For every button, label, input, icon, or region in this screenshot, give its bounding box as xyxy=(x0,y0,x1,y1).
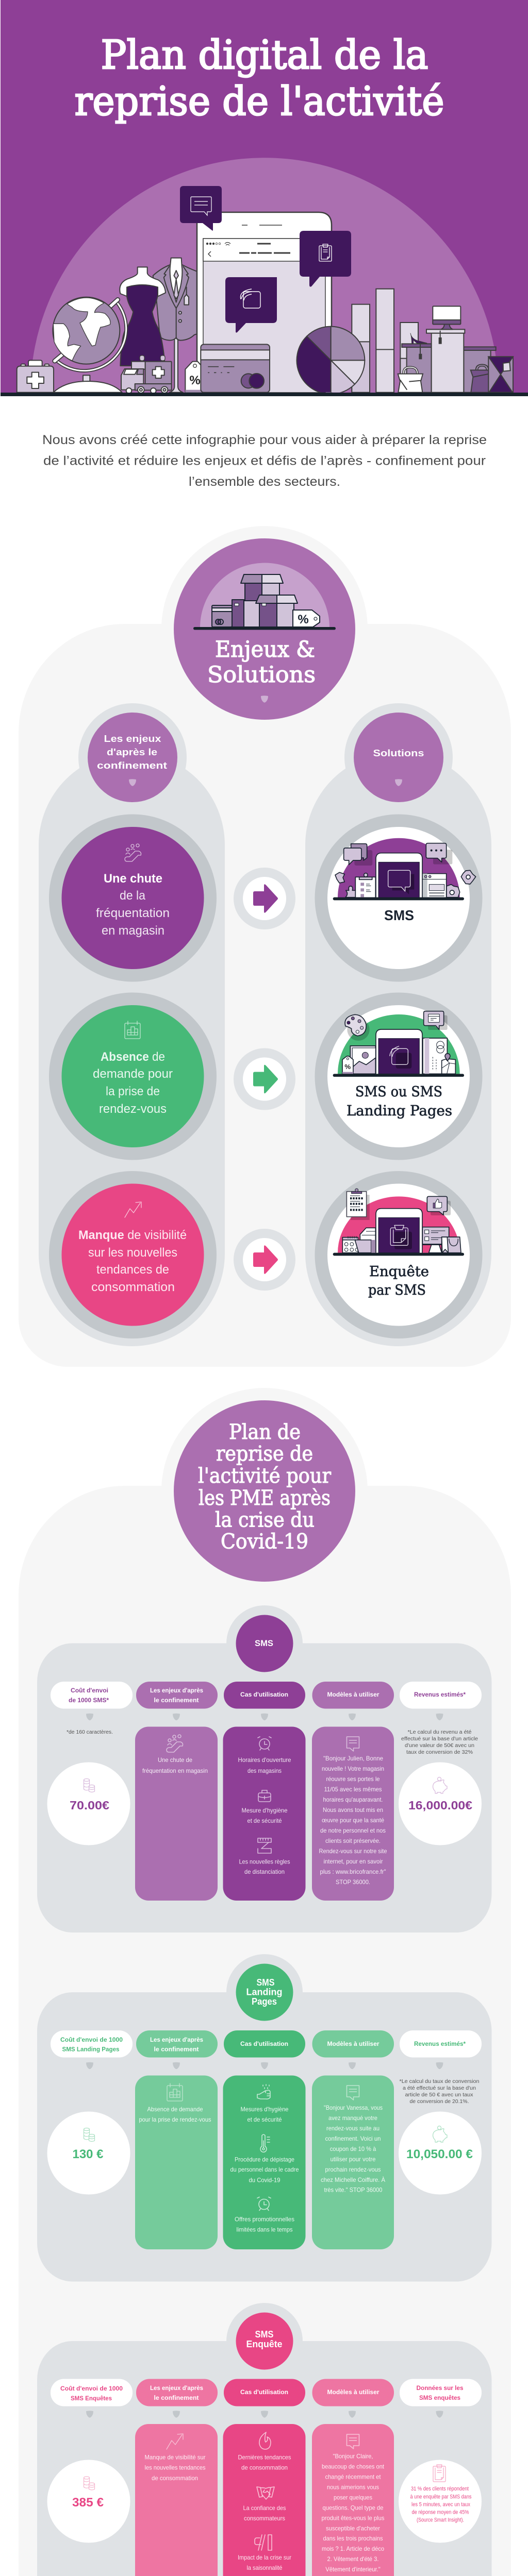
card: modèles: chez Michelle Coiffure. À xyxy=(321,2176,385,2183)
heading circle: plan de reprise: Covid-19 xyxy=(221,1530,308,1554)
cost column: *de 160 caractères. xyxy=(67,1730,113,1735)
card: cas d'utilisation xyxy=(223,2424,305,2576)
data column: de réponse moyen de 45% xyxy=(411,2509,469,2515)
illustration: objects on the left xyxy=(17,258,270,394)
icon: escalator xyxy=(125,844,141,861)
icon: first aid kit xyxy=(17,360,54,393)
bubble: survey xyxy=(300,231,351,287)
icon: trend xyxy=(125,1202,141,1217)
ground line xyxy=(1,393,528,396)
intro text: Nous avons créé cette infographie pour vous aider à préparer la reprise xyxy=(42,433,487,447)
header pills: le confinement xyxy=(154,2394,199,2401)
intro text xyxy=(42,433,487,489)
sub heading: les enjeux xyxy=(78,703,187,811)
markers xyxy=(86,2411,443,2418)
revenue column: 16,000.00€ xyxy=(408,1799,472,1812)
card: modèles: très vite." STOP 36000 xyxy=(324,2187,383,2194)
section badge: Landing xyxy=(246,1987,283,1997)
heading circle: plan de reprise: Plan de xyxy=(229,1420,301,1444)
markers xyxy=(86,2062,443,2069)
card: cas d'utilisation xyxy=(223,2075,305,2249)
icon: gift box xyxy=(488,357,513,393)
hemisphere backdrop xyxy=(30,158,499,393)
card: cas d'utilisation: Les nouvelles règles xyxy=(239,1858,290,1865)
icon: shop shelves xyxy=(402,329,496,393)
heading circle: plan de reprise: reprise de xyxy=(216,1442,313,1466)
card: cas d'utilisation: la saisonnalité xyxy=(246,2564,283,2571)
header pills: Coût d'envoi xyxy=(71,1687,108,1694)
card: enjeux xyxy=(135,2075,218,2249)
enjeu 1: chute de fréquentation: de la xyxy=(120,889,146,903)
header pills: le confinement xyxy=(154,1697,199,1704)
card: cas d'utilisation: des magasins xyxy=(248,1767,282,1774)
card: modèles: nouvelle ! Votre magasin xyxy=(322,1765,384,1772)
cost column xyxy=(47,2460,130,2543)
header pills: Coût d'envoi de 1000 xyxy=(60,2385,123,2392)
panel: left column enjeux xyxy=(39,752,225,1346)
enjeu 3: manque de visibilité xyxy=(49,1171,217,1338)
data column: à une enquête par SMS dans xyxy=(410,2494,472,2500)
solution 1: SMS xyxy=(315,814,483,982)
illustration: objects on the right xyxy=(297,289,513,394)
intro text: l’ensemble des secteurs. xyxy=(189,474,340,489)
card: cas d'utilisation: limitées dans le temps xyxy=(236,2226,293,2233)
icon: monitor xyxy=(433,306,460,329)
icon: boxes xyxy=(212,574,320,627)
icon: bank card xyxy=(201,344,270,393)
card: cas d'utilisation: Mesure d'hygiène xyxy=(241,1807,288,1814)
card: modèles: Nous avons tout mis en xyxy=(323,1806,383,1814)
card: modèles: prochain rendez-vous xyxy=(325,2166,381,2173)
sub heading: les enjeux: d'après le xyxy=(107,747,157,757)
enjeu 3: manque de visibilité: sur les nouvelles xyxy=(88,1246,177,1260)
title: reprise de l'activité xyxy=(74,79,444,125)
enjeu 2: absence de demande xyxy=(49,992,217,1160)
arrow 2 xyxy=(234,1048,295,1110)
enjeu 2: absence de demande: la prise de xyxy=(106,1084,160,1098)
pie chart xyxy=(297,327,365,394)
card: cas d'utilisation: Mesures d'hygiène xyxy=(240,2106,289,2113)
bar chart xyxy=(352,289,418,393)
section badge: Enquête xyxy=(246,2339,283,2349)
card: enjeux: Manque de visibilité sur xyxy=(144,2453,205,2461)
sub heading: les enjeux: Les enjeux xyxy=(104,734,161,744)
card: cas d'utilisation: La confiance des xyxy=(243,2504,286,2512)
solution 3: Enquête par SMS: par SMS xyxy=(368,1282,426,1298)
markers xyxy=(86,1714,443,1720)
header pills: Cas d'utilisation xyxy=(240,1691,288,1698)
card: cas d'utilisation: Offres promotionnelles xyxy=(235,2215,294,2223)
card: modèles: internet, pour en savoir xyxy=(324,1858,383,1865)
enjeu 3: manque de visibilité: Manque de visibilité xyxy=(78,1228,187,1242)
header pills: SMS Landing Pages xyxy=(62,2045,120,2053)
card: enjeux xyxy=(135,2424,218,2576)
header pills: Données sur les xyxy=(417,2384,464,2392)
heading circle: plan de reprise xyxy=(174,1400,355,1582)
solution 2: SMS ou SMS Landing Pages xyxy=(315,992,483,1160)
header pills xyxy=(51,2379,482,2406)
card: enjeux xyxy=(135,1727,218,1901)
revenue column: taux de conversion de 32% xyxy=(406,1750,473,1755)
illustration: landing pages: % xyxy=(344,1063,351,1071)
sub heading: solutions xyxy=(344,703,453,811)
header pills: SMS enquêtes xyxy=(419,2394,460,2401)
card: enjeux: les nouvelles tendances xyxy=(144,2464,205,2471)
panel: plan de reprise xyxy=(19,1388,511,2576)
icon: boxes: % xyxy=(298,613,309,626)
revenue column: *Le calcul du revenu a été xyxy=(407,1730,472,1735)
revenue column: d'une valeur de 50€ avec un xyxy=(405,1743,474,1749)
icon: globe xyxy=(53,297,126,393)
title xyxy=(74,32,444,125)
cost column: 130 € xyxy=(72,2147,103,2161)
section badge xyxy=(226,1605,303,1682)
revenue column: *Le calcul du taux de conversion xyxy=(399,2078,480,2084)
enjeu 2: absence de demande: Absence de xyxy=(101,1050,165,1064)
card: modèles: Rendez-vous sur notre site xyxy=(319,1848,387,1855)
card: cas d'utilisation: consommateurs xyxy=(244,2515,285,2522)
card: modèles: coupon de 10 % à xyxy=(330,2145,376,2153)
revenue column: a été effectué sur la base d'un xyxy=(403,2085,476,2091)
illustration: landing pages xyxy=(333,1011,464,1077)
card: modèles xyxy=(312,2424,394,2576)
section badge: SMS xyxy=(257,1977,274,1988)
enjeu 1: chute de fréquentation: en magasin xyxy=(102,924,164,938)
cost column: 70.00€ xyxy=(70,1799,109,1812)
card: modèles: avez manqué votre xyxy=(328,2114,377,2122)
bubble: message xyxy=(180,186,222,231)
card: enjeux: pour la prise de rendez-vous xyxy=(139,2116,211,2123)
icon: price tag xyxy=(185,362,205,393)
solution 1: SMS: SMS xyxy=(384,907,414,923)
header pills: de 1000 SMS* xyxy=(69,1697,109,1704)
illustration: tablet xyxy=(197,212,332,393)
card: cas d'utilisation: de consommation xyxy=(241,2464,288,2471)
card: modèles: mois ? 1. Article de déco xyxy=(322,2545,384,2552)
header pills xyxy=(51,2030,482,2058)
solution 3: Enquête par SMS xyxy=(315,1171,483,1338)
panel: enjeux et solutions xyxy=(19,526,511,1367)
section badge xyxy=(226,1954,303,2030)
card: enjeux: Absence de demande xyxy=(147,2106,203,2113)
revenue column xyxy=(399,1730,482,1845)
section: SMS Enquête xyxy=(37,2303,492,2576)
card: modèles: nous aimerions vous xyxy=(327,2483,379,2490)
header pills: Modèles à utiliser xyxy=(327,2388,380,2396)
icon: dress mannequin xyxy=(120,267,166,366)
data column: 31 % des clients répondent xyxy=(411,2486,469,2492)
card: modèles: dans les trois prochains xyxy=(323,2535,383,2542)
card: modèles: utiliser pour votre xyxy=(330,2156,376,2163)
hero banner xyxy=(1,0,528,396)
revenue column: 10,050.00 € xyxy=(406,2147,473,2161)
card: modèles: de notre personnel et nos xyxy=(320,1827,386,1834)
icon: ambulance xyxy=(121,355,172,394)
heading circle: plan de reprise: la crise du xyxy=(215,1509,315,1532)
title: Plan digital de la xyxy=(101,32,428,78)
arrow 1 xyxy=(234,868,295,929)
card: modèles: 2. Vêtement d'été 3. xyxy=(327,2555,378,2563)
card: modèles: Vêtement d'interieur." xyxy=(325,2566,381,2573)
header pills: Cas d'utilisation xyxy=(240,2040,288,2047)
card: cas d'utilisation: Impact de la crise sur xyxy=(238,2554,291,2561)
card: modèles: plus : www.bricofrance.fr" xyxy=(320,1868,386,1875)
card: modèles: clients soit préservée. xyxy=(325,1837,381,1844)
card: modèles: réouvre ses portes le xyxy=(326,1775,380,1783)
section badge: SMS xyxy=(255,2329,273,2340)
card: modèles: beaucoup de choses ont xyxy=(322,2463,385,2470)
header pills: Les enjeux d'après xyxy=(150,1687,203,1694)
solution 2: SMS ou SMS Landing Pages: SMS ou SMS xyxy=(355,1084,442,1100)
solution 3: Enquête par SMS: Enquête xyxy=(369,1264,429,1280)
card: modèles xyxy=(312,2075,394,2249)
card: modèles: STOP 36000. xyxy=(336,1878,370,1886)
card: cas d'utilisation: et de sécurité xyxy=(248,1817,282,1824)
header pills: Cas d'utilisation xyxy=(240,2388,288,2396)
cost column xyxy=(47,1730,130,1845)
enjeu 3: manque de visibilité: consommation xyxy=(91,1280,175,1294)
icon: shopping bags xyxy=(398,364,494,393)
card: modèles: "Bonjour Claire, xyxy=(333,2452,373,2460)
header pills: Coût d'envoi de 1000 xyxy=(60,2036,123,2043)
header pills: SMS Enquêtes xyxy=(71,2395,112,2402)
cost column xyxy=(47,2111,130,2195)
data column: les 5 minutes, avec un taux xyxy=(411,2502,470,2508)
sub heading: les enjeux: confinement xyxy=(97,760,167,771)
header pills: Les enjeux d'après xyxy=(150,2384,203,2392)
card: enjeux: de consommation xyxy=(152,2475,198,2482)
solution 2: SMS ou SMS Landing Pages: Landing Pages xyxy=(346,1103,452,1119)
card: cas d'utilisation: de distanciation xyxy=(244,1868,285,1875)
section badge xyxy=(226,2303,303,2379)
revenue column: article de 50 € avec un taux xyxy=(405,2092,473,2098)
section: SMS Landing Pages xyxy=(37,1954,492,2281)
enjeu 1: chute de fréquentation: fréquentation xyxy=(96,906,170,920)
card: modèles: changé récemment et xyxy=(325,2473,381,2480)
data column xyxy=(399,2460,482,2543)
card: cas d'utilisation: Dernières tendances xyxy=(238,2453,291,2461)
card: cas d'utilisation: du personnel dans le cadre xyxy=(230,2166,299,2173)
card: modèles: œuvre pour que la santé xyxy=(322,1817,384,1824)
revenue column: de conversion de 20.1%. xyxy=(409,2098,469,2105)
panel: right column solutions xyxy=(305,752,491,1346)
header pills: Revenus estimés* xyxy=(414,1691,466,1698)
card: modèles xyxy=(312,1727,394,1901)
icon: suit jacket xyxy=(153,258,197,341)
section badge: Pages xyxy=(252,1996,277,2007)
card: enjeux: Une chute de xyxy=(158,1756,192,1764)
data column: (Source Smart Insight). xyxy=(417,2517,464,2523)
intro text: de l’activité et réduire les enjeux et défis de l’après - confinement pour xyxy=(43,453,486,468)
illustration: survey xyxy=(333,1189,464,1256)
card: modèles: questions. Quel type de xyxy=(323,2504,384,2511)
icon: price tag: % xyxy=(189,374,201,387)
header pills: Modèles à utiliser xyxy=(327,2040,380,2047)
enjeu 1: chute de fréquentation: Une chute xyxy=(104,872,162,886)
arrow 3 xyxy=(234,1229,295,1291)
header pills: Revenus estimés* xyxy=(414,2040,466,2047)
card: cas d'utilisation: Horaires d'ouverture xyxy=(238,1756,291,1764)
bubble: landing page xyxy=(225,277,277,333)
heading circle: Enjeux et Solutions: Solutions xyxy=(207,662,316,688)
heading circle: Enjeux et Solutions xyxy=(174,538,355,720)
heading circle: Enjeux et Solutions: Enjeux & xyxy=(215,637,315,663)
illustration: SMS xyxy=(333,838,476,900)
icon: coat stand xyxy=(169,338,183,393)
card: modèles: "Bonjour Vanessa, vous xyxy=(324,2104,383,2111)
enjeu 1: chute de fréquentation xyxy=(49,814,217,982)
card: modèles: poser quelques xyxy=(334,2494,372,2501)
card: modèles: "Bonjour Julien, Bonne xyxy=(323,1755,383,1762)
sub heading: solutions: Solutions xyxy=(373,748,424,758)
card: cas d'utilisation: Procédure de dépistage xyxy=(235,2156,294,2163)
header pills: Modèles à utiliser xyxy=(327,1691,380,1698)
card: modèles: susceptible d'acheter xyxy=(326,2524,380,2532)
icon: calendar xyxy=(125,1021,140,1039)
enjeu 2: absence de demande: rendez-vous xyxy=(99,1102,167,1116)
revenue column: effectué sur la base d'un article xyxy=(401,1736,478,1742)
card: modèles: rendez-vous suite au xyxy=(326,2125,380,2132)
header pills xyxy=(51,1682,482,1708)
card: modèles: 11/05 avec les mêmes xyxy=(324,1786,382,1793)
enjeu 3: manque de visibilité: tendances de xyxy=(96,1263,169,1277)
header pills: Les enjeux d'après xyxy=(150,2036,203,2043)
revenue column xyxy=(399,2078,482,2195)
cost column: 385 € xyxy=(72,2496,104,2510)
card: modèles: confinement. Voici un xyxy=(325,2135,381,2142)
section: SMS xyxy=(37,1605,492,1933)
card: cas d'utilisation: et de sécurité xyxy=(248,2116,282,2123)
header pills: le confinement xyxy=(154,2045,199,2053)
section badge: SMS xyxy=(255,1638,273,1648)
card: modèles: produit êtes-vous le plus xyxy=(322,2514,385,2521)
card: cas d'utilisation: du Covid-19 xyxy=(249,2176,280,2183)
heading circle: plan de reprise: l'activité pour xyxy=(198,1464,332,1488)
card: cas d'utilisation xyxy=(223,1727,305,1901)
card: modèles: horaires qu'auparavant. xyxy=(323,1796,383,1803)
enjeu 2: absence de demande: demande pour xyxy=(93,1067,173,1081)
card: enjeux: fréquentation en magasin xyxy=(142,1767,208,1774)
heading circle: plan de reprise: les PME après xyxy=(199,1486,331,1510)
